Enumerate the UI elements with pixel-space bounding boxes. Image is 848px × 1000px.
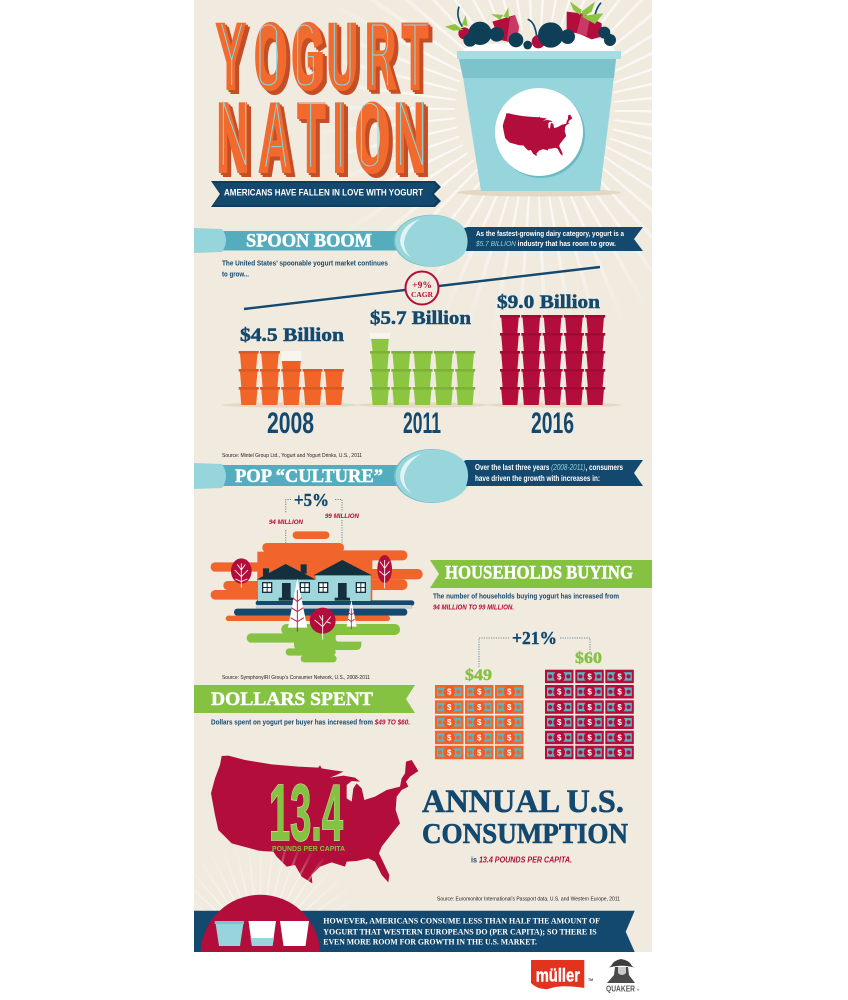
callout: plus 5 percent households: 94 MILLION [269, 519, 303, 526]
spoon: Pop Culture heading [194, 449, 470, 503]
bills: 60 dollars [545, 670, 634, 759]
orange clouds [211, 531, 423, 621]
cup label with map [497, 90, 585, 178]
illustration: houses and landscape [211, 531, 423, 662]
heading: Annual US Consumption: CONSUMPTION [422, 819, 628, 850]
spoon: Spoon Boom heading [194, 215, 469, 267]
map: United States with 13.4: 13.4 [269, 768, 343, 857]
map: United States with 13.4: 13.4 [269, 768, 343, 857]
source: Mintel: Source: Mintel Group Ltd., Yogurt and Yogurt Drinks, U.S., 2011 [222, 453, 362, 459]
heading: Annual US Consumption: is 13.4 POUNDS PER CAPITA. [471, 854, 572, 864]
chart column: 2008: 2008 [267, 407, 314, 440]
callout: plus 21 percent dollars: $49 [465, 667, 492, 684]
logo: muller: müller [536, 966, 580, 986]
heading: Annual US Consumption: ANNUAL U.S. [422, 784, 624, 820]
chart column: 2011: 2011 [403, 407, 441, 440]
callout: growth over three years: Over the last three years (2008-2011), consumers [475, 463, 624, 472]
callout: plus 21 percent dollars: +21% [512, 628, 557, 648]
callout: plus 21 percent dollars [465, 628, 602, 684]
text: households detail [433, 592, 619, 612]
text: households detail: 94 MILLION TO 99 MILLION. [433, 602, 514, 612]
map: United States with 13.4: POUNDS PER CAPITA [272, 844, 345, 853]
banner: Dollars Spent: DOLLARS SPENT [211, 690, 374, 710]
chart column: 2008 [239, 325, 344, 440]
callout: growth over three years: have driven the growth with increases in: [475, 474, 600, 483]
chart column: 2016: 2016 [531, 407, 574, 440]
title: Yogurt Nation: YOGURT [219, 8, 430, 108]
text: households detail: The number of households buying yogurt has increased from [433, 592, 619, 600]
ground shadows [222, 402, 621, 408]
title: Yogurt Nation: NATION [219, 87, 427, 193]
callout: 5.7 billion industry: As the fastest-growing dairy category, yogurt is a [476, 229, 625, 238]
bottom banner: western europe comparison: YOGURT THAT WESTERN EUROPEANS DO (PER CAPITA); SO THERE IS [323, 926, 597, 936]
bills: 60 dollars: $$$$$$$$$$$$$$$$$$ [557, 672, 622, 757]
callout: plus 21 percent dollars: $60 [575, 650, 602, 667]
subtitle ribbon: AMERICANS HAVE FALLEN IN LOVE WITH YOGURT [224, 188, 423, 198]
green lawn [247, 624, 400, 662]
text: dollars detail: Dollars spent on yogurt per buyer has increased from $49 TO $60. [211, 718, 410, 726]
map: United States with 13.4 [211, 756, 418, 883]
banner: Households Buying: HOUSEHOLDS BUYING [445, 564, 633, 584]
callout: plus 5 percent households: +5% [294, 490, 329, 510]
rays behind semicircle [194, 850, 329, 910]
panel: background [194, 0, 652, 952]
title: Yogurt Nation [217, 6, 432, 195]
growth line with CAGR badge: +9% [412, 281, 432, 291]
title: Yogurt Nation: NATION [217, 85, 425, 191]
bills: 49 dollars [435, 685, 524, 759]
chart column: 2008: $4.5 Billion [240, 325, 344, 346]
text: spoonable market intro: The United States’ spoonable yogurt market continues [222, 258, 388, 268]
illustration: yogurt cup with berries [445, 2, 621, 196]
spoon: Pop Culture heading: POP “CULTURE” [235, 466, 383, 487]
bottom banner: western europe comparison: HOWEVER, AMERICANS CONSUME LESS THAN HALF THE AMOUNT OF [323, 916, 600, 926]
callout: plus 5 percent households [269, 490, 359, 562]
source: Euromonitor: Source: Euromonitor International’s Passport data, U.S. and Western Europe, 2011 [437, 896, 620, 902]
chart column: 2016 [497, 292, 605, 440]
infographic [194, 0, 652, 993]
bills: 49 dollars: $$$$$$$$$$$$$$$ [447, 688, 512, 757]
callout: 5.7 billion industry [464, 227, 643, 251]
text: spoonable market intro [222, 258, 388, 278]
banner: Households Buying [430, 560, 652, 588]
callout: 5.7 billion industry: $5.7 BILLION industry that has room to grow. [475, 239, 616, 248]
logo: quaker: ® [637, 988, 640, 992]
banner: Dollars Spent [194, 685, 415, 713]
logo: muller: TM [588, 978, 593, 982]
spoon: Spoon Boom heading: SPOON BOOM [246, 232, 372, 252]
houses [257, 560, 372, 601]
cup body [463, 77, 614, 191]
title inline: Yogurt [222, 23, 427, 85]
text: spoonable market intro: to grow... [222, 270, 249, 278]
logo: quaker [606, 959, 640, 994]
bottom banner: western europe comparison: EVEN MORE ROOM FOR GROWTH IN THE U.S. MARKET. [323, 936, 537, 946]
chart column: 2011: $5.7 Billion [370, 308, 471, 329]
bottom banner: western europe comparison [194, 895, 635, 952]
yogurt and berries [445, 2, 616, 51]
sunburst rays behind cup [370, 0, 700, 275]
title: Yogurt Nation: NATION [221, 89, 429, 195]
growth line with CAGR badge: CAGR [411, 290, 434, 299]
chart column: 2011 [370, 308, 475, 440]
title inline: Nation [223, 102, 422, 167]
callout: growth over three years [464, 460, 643, 486]
growth line with CAGR badge [244, 267, 600, 309]
title: Yogurt Nation: YOGURT [217, 6, 428, 106]
title: Yogurt Nation: YOGURT [221, 10, 432, 110]
source: SymphonyIRI: Source: SymphonyIRI Group’s Consumer Network, U.S., 2008-2011 [222, 675, 370, 681]
chart column: 2016: $9.0 Billion [497, 292, 600, 313]
road [234, 600, 414, 616]
callout: plus 5 percent households: 99 MILLION [325, 513, 359, 520]
trees [231, 555, 392, 640]
logo: muller [531, 960, 593, 989]
subtitle ribbon [211, 181, 441, 207]
logo: quaker: QUAKER [606, 984, 635, 994]
heading: Annual US Consumption [422, 784, 628, 864]
comparison cups [215, 921, 309, 946]
